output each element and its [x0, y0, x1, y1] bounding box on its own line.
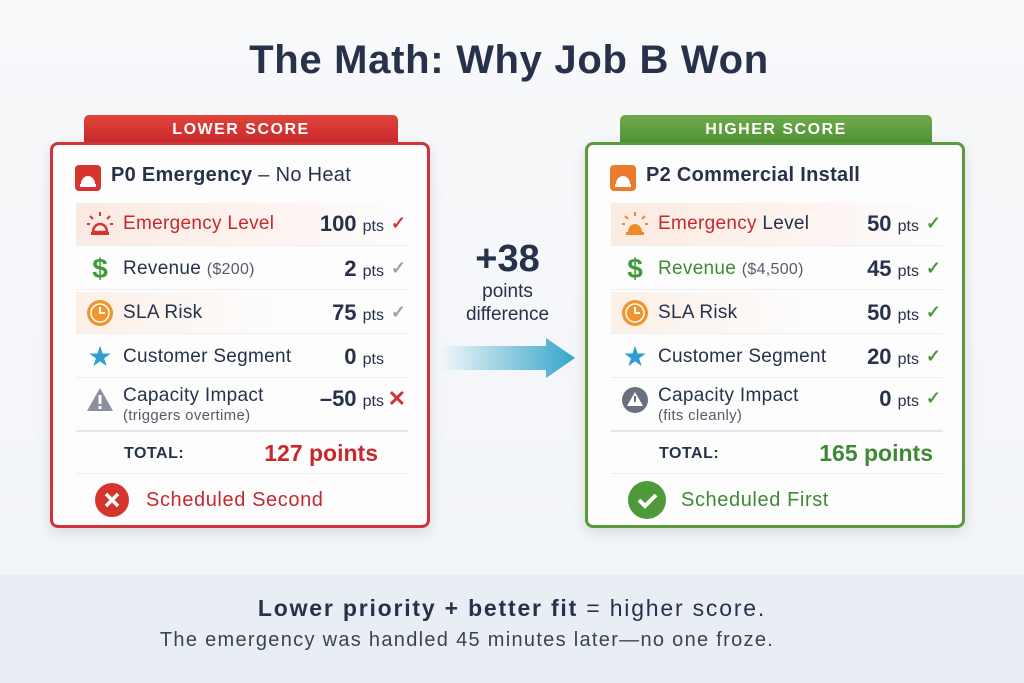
callout: +38 difference: difference	[466, 304, 549, 325]
row: revenue	[611, 248, 943, 290]
panel: job A card	[50, 142, 430, 528]
row: customer segment: ✓	[926, 346, 941, 366]
row: revenue: ✓	[926, 258, 941, 278]
icon: siren	[87, 212, 113, 235]
panel: job B card	[585, 142, 965, 528]
row: customer segment: 20 pts	[867, 344, 919, 369]
status: scheduled second	[95, 483, 324, 517]
row: capacity impact	[611, 380, 943, 432]
row: SLA risk	[76, 292, 408, 334]
row: capacity impact: ✓	[926, 388, 941, 408]
icon: warning circle	[622, 387, 648, 413]
row: SLA risk: SLA Risk	[658, 302, 738, 323]
tab: higher score	[620, 115, 932, 145]
icon: warning	[87, 388, 113, 411]
row: emergency level: 50 pts	[867, 211, 919, 236]
callout: +38 difference	[466, 238, 549, 325]
row: capacity impact: –50 pts	[320, 386, 384, 411]
footer band	[0, 575, 1024, 683]
row: customer segment: Customer Segment	[658, 346, 826, 367]
row: SLA risk: ✓	[391, 302, 406, 322]
row: SLA risk: ✓	[926, 302, 941, 322]
total B	[611, 434, 943, 474]
row: revenue: 45 pts	[867, 256, 919, 281]
row: emergency level	[76, 203, 408, 246]
header B: P2 Commercial Install	[646, 164, 860, 186]
row: revenue: 2 pts	[344, 256, 384, 281]
icon: alarm	[75, 165, 101, 191]
header A: P0 Emergency – No Heat	[111, 164, 351, 186]
total B: 165 points	[819, 440, 933, 466]
icon: clock	[87, 300, 113, 326]
tab: higher score: HIGHER SCORE	[705, 121, 847, 138]
status: scheduled first: Scheduled First	[681, 489, 829, 511]
tab: lower score: LOWER SCORE	[172, 121, 310, 138]
icon: star: ★	[622, 340, 648, 372]
title: The Math: Why Job B Won	[249, 38, 769, 82]
icon: dollar: $	[627, 252, 643, 284]
callout: +38 difference: points	[482, 281, 533, 302]
status: scheduled first	[628, 481, 829, 519]
row: capacity impact: (fits cleanly)	[658, 407, 742, 424]
row: capacity impact: (triggers overtime)	[123, 407, 250, 424]
row: customer segment: 0 pts	[344, 344, 384, 369]
row: customer segment	[76, 336, 408, 378]
callout: +38 difference: +38	[475, 238, 540, 280]
row: SLA risk	[611, 292, 943, 334]
icon: star: ★	[87, 340, 113, 372]
row: revenue: Revenue ($4,500)	[658, 258, 804, 279]
arrow	[446, 338, 575, 378]
total A: TOTAL:	[124, 445, 184, 462]
icon: clock	[622, 300, 648, 326]
total A	[76, 434, 408, 474]
row: emergency level	[611, 203, 943, 246]
row: capacity impact: Capacity Impact	[123, 385, 264, 406]
row: SLA risk: SLA Risk	[123, 302, 202, 323]
row: customer segment: Customer Segment	[123, 346, 291, 367]
total B: TOTAL:	[659, 445, 719, 462]
total A: 127 points	[264, 440, 378, 466]
icon: dollar: $	[92, 252, 108, 284]
row: customer segment	[611, 336, 943, 378]
footer note: The emergency was handled 45 minutes later—no one froze.	[160, 629, 774, 651]
row: emergency level: ✓	[391, 213, 406, 233]
row: emergency level: 100 pts	[320, 211, 384, 236]
icon: siren	[622, 212, 648, 235]
row: revenue: ✓	[391, 258, 406, 278]
status: scheduled second: Scheduled Second	[146, 489, 324, 511]
row: capacity impact: ✕	[388, 386, 406, 411]
header B	[610, 164, 860, 191]
row: SLA risk: 50 pts	[867, 300, 919, 325]
row: emergency level: Emergency Level	[123, 213, 274, 234]
row: capacity impact: Capacity Impact	[658, 385, 799, 406]
row: SLA risk: 75 pts	[332, 300, 384, 325]
row: emergency level: ✓	[926, 213, 941, 233]
row: revenue	[76, 248, 408, 290]
row: capacity impact: 0 pts	[879, 386, 919, 411]
row: emergency level: Emergency Level	[658, 213, 809, 234]
tab: lower score	[84, 115, 398, 145]
row: revenue: Revenue ($200)	[123, 258, 255, 279]
row: capacity impact	[76, 380, 408, 432]
icon: orange alarm	[610, 165, 636, 191]
footer headline: Lower priority + better fit = higher score.	[258, 595, 766, 621]
